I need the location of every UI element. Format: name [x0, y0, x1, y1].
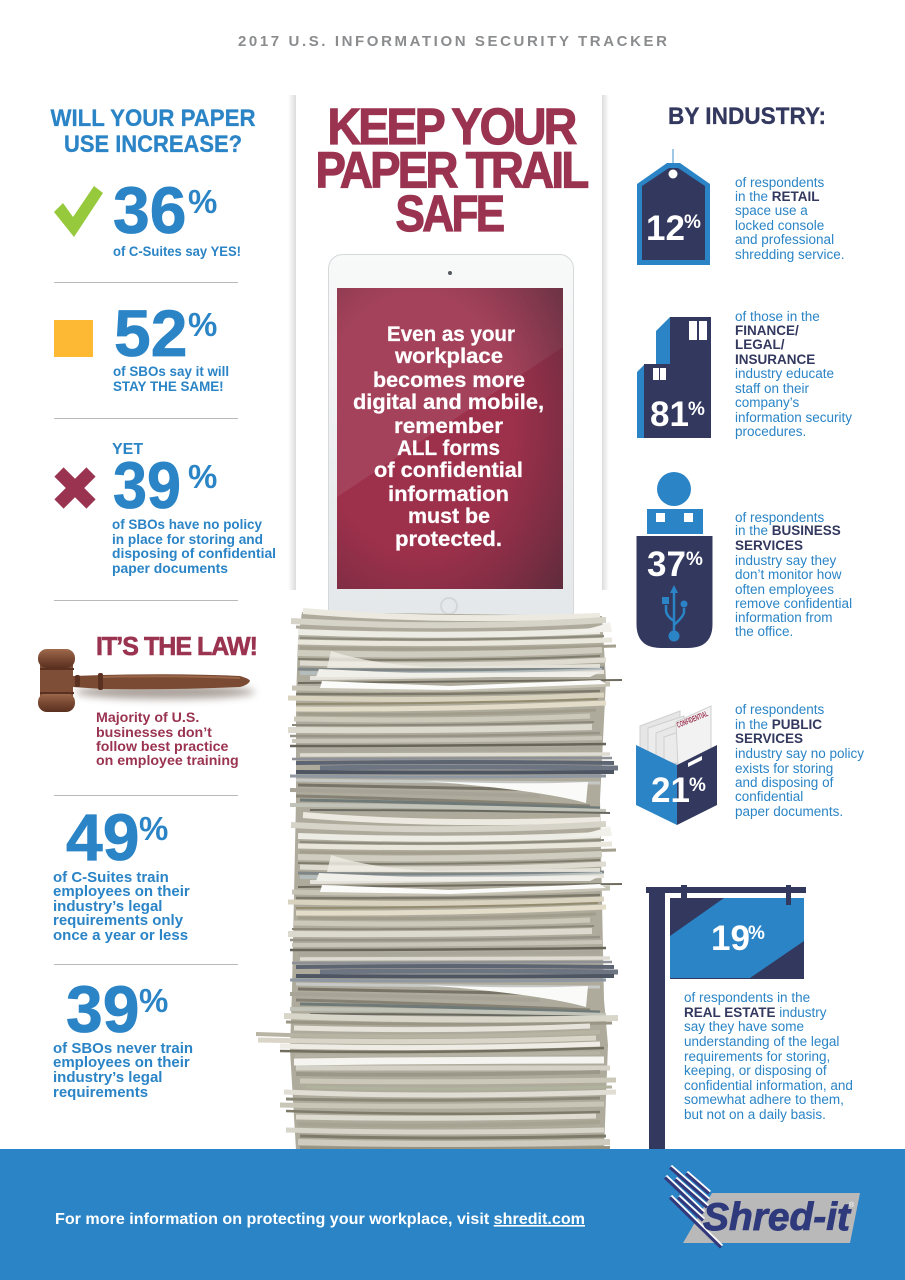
stat: 49 percent: 49 — [66, 800, 139, 874]
tablet text: becomes more — [373, 369, 525, 392]
text: real estate: industry — [776, 1005, 827, 1020]
text: finance: LEGAL/ — [735, 337, 785, 352]
stat: 39 percent never train: % — [139, 982, 168, 1019]
stat: 36 percent — [113, 173, 241, 259]
text: finance: company’s — [735, 395, 800, 410]
text: finance: industry educate — [735, 366, 834, 381]
text: public services: in the PUBLIC — [735, 717, 822, 732]
stat: 49 percent — [53, 800, 190, 944]
heading: will your paper use increase: USE INCREASE? — [64, 131, 242, 158]
text: real estate: keeping, or disposing of — [684, 1063, 827, 1078]
tablet camera — [448, 271, 452, 275]
text: business services: SERVICES — [735, 538, 803, 553]
tablet text: digital and mobile, — [353, 391, 544, 414]
panel: real estate — [646, 885, 853, 1152]
text: finance: staff on their — [735, 381, 810, 396]
text: real estate: somewhat adhere to them, — [684, 1092, 844, 1107]
stat: 36 percent: % — [188, 183, 217, 220]
panel: retail — [637, 149, 845, 265]
panel: it's the law — [96, 631, 257, 769]
icon: usb drive: % — [686, 549, 703, 570]
text: majority of businesses — [96, 710, 239, 769]
stat: 39 percent: % — [188, 458, 217, 495]
tablet text: must be — [408, 505, 490, 528]
panel: will your paper use increase — [50, 105, 276, 576]
text: majority of businesses: Majority of U.S. — [96, 710, 199, 726]
tablet text: ALL forms — [397, 437, 500, 460]
icon: gavel — [38, 649, 255, 712]
tablet — [328, 254, 574, 634]
text: real estate: of respondents in the — [684, 990, 810, 1005]
text: real estate: but not on a daily basis. — [684, 1107, 826, 1122]
text: public services: industry say no policy — [735, 746, 864, 761]
icon: file box — [636, 706, 717, 825]
text: business services: in the BUSINESS — [735, 523, 841, 538]
tablet text: information — [388, 483, 509, 506]
icon: buildings: 81 — [650, 395, 689, 434]
text: business services: remove confidential — [735, 596, 852, 611]
title: 2017 U.S. INFORMATION SECURITY TRACKER — [238, 33, 667, 50]
text: retail: shredding service. — [735, 247, 845, 262]
stat: 39 percent never train: 39 — [66, 972, 139, 1046]
stat: 39 percent — [112, 441, 276, 576]
stat: 52 percent — [113, 296, 229, 394]
shred-it logo: ® — [849, 1201, 855, 1209]
text: public services: SERVICES — [735, 731, 803, 746]
stat: 49 percent: once a year or less — [53, 927, 188, 944]
text: retail: and professional — [735, 232, 834, 247]
tablet text: protected. — [395, 528, 502, 551]
stat: 49 percent: of C-Suites train — [53, 869, 169, 886]
main heading: PAPER TRAIL — [316, 142, 588, 198]
text: majority of businesses: on employee training — [96, 753, 239, 769]
stat: 49 percent: requirements only — [53, 912, 184, 929]
icon: real estate sign: 19 — [711, 919, 750, 958]
shred-it logo — [665, 1166, 860, 1248]
icon: price tag: 12 — [646, 209, 685, 248]
heading: will your paper use increase — [50, 105, 256, 158]
text: business services: don’t monitor how — [735, 567, 842, 582]
icon: usb drive: 37 — [647, 545, 686, 584]
paper stack — [256, 611, 622, 1150]
text: business services: information from — [735, 610, 833, 625]
text: business services: industry say they — [735, 553, 837, 568]
tablet screen — [337, 288, 563, 589]
text: public services: confidential — [735, 789, 803, 804]
text: public services: paper documents. — [735, 804, 843, 819]
stat: 39 percent never train: requirements — [53, 1084, 148, 1101]
text: retail: of respondents — [735, 175, 825, 190]
stat: 39 percent never train: of SBOs never train — [53, 1040, 193, 1057]
icon: file box: 21 — [651, 771, 690, 810]
icon: file box: % — [689, 775, 706, 796]
stat: 36 percent: 36 — [113, 173, 186, 247]
tablet text: Even as your — [387, 323, 515, 346]
text: finance: information security — [735, 410, 852, 425]
text: business services: often employees — [735, 582, 834, 597]
stat: 39 percent: in place for storing and — [112, 532, 263, 547]
tablet text — [353, 323, 544, 551]
stat: 39 percent: YET — [112, 441, 143, 458]
footer text: For more information on protecting your workplace, visit shredit.com — [55, 1211, 585, 1228]
tablet text: workplace — [394, 345, 503, 368]
stat: 52 percent: of SBOs say it will — [113, 364, 229, 379]
tablet text: remember — [394, 415, 503, 438]
icon: real estate sign — [646, 885, 806, 1152]
text: finance: procedures. — [735, 424, 806, 439]
text: public services: and disposing of — [735, 775, 834, 790]
icon: file box: CONFIDENTIAL — [675, 709, 709, 730]
tablet frame — [328, 254, 574, 634]
text: retail: locked console — [735, 218, 824, 233]
stat: 39 percent never train: employees on their — [53, 1054, 190, 1071]
tablet screen glare — [337, 288, 563, 497]
text: real estate: requirements for storing, — [684, 1049, 830, 1064]
heading: by industry: BY INDUSTRY: — [668, 103, 826, 130]
text: real estate: REAL ESTATE — [684, 1005, 776, 1020]
stat: 39 percent: 39 — [113, 448, 181, 522]
icon: maroon x — [59, 472, 91, 504]
text: majority of businesses: follow best practice — [96, 739, 229, 755]
stat: 39 percent: paper documents — [112, 561, 228, 576]
tablet text: of confidential — [374, 459, 523, 482]
text: majority of businesses: businesses don’t — [96, 725, 212, 741]
text: finance: of those in the — [735, 309, 820, 324]
stat: 39 percent: of SBOs have no policy — [112, 517, 263, 532]
stat: 39 percent never train — [53, 972, 193, 1101]
stat: 49 percent: % — [139, 810, 168, 847]
shred-it logo: Shred-it — [703, 1196, 852, 1239]
tablet screen vignette — [337, 288, 563, 589]
stat: 39 percent never train: industry’s legal — [53, 1069, 162, 1086]
footer band — [0, 1149, 905, 1280]
text: business services: the office. — [735, 624, 793, 639]
icon: usb drive — [636, 472, 712, 648]
text: real estate: understanding of the legal — [684, 1034, 839, 1049]
text: public services: exists for storing — [735, 761, 833, 776]
heading: it's the law: IT’S THE LAW! — [96, 631, 257, 661]
text: finance: INSURANCE — [735, 352, 815, 367]
icon: real estate sign: % — [748, 923, 765, 944]
text: real estate: say they have some — [684, 1019, 804, 1034]
stat: 49 percent: industry’s legal — [53, 898, 162, 915]
text: retail: in the RETAIL — [735, 189, 820, 204]
stat: 52 percent: 52 — [114, 296, 187, 370]
main heading — [316, 98, 588, 242]
stat: 39 percent: disposing of confidential — [112, 546, 276, 561]
text: finance: FINANCE/ — [735, 323, 799, 338]
panel dividers — [288, 95, 609, 590]
heading: will your paper use increase: WILL YOUR PAPER — [50, 105, 256, 132]
panel: public services — [636, 702, 864, 825]
text: public services: of respondents — [735, 702, 825, 717]
icon: price tag: % — [684, 212, 701, 233]
icon: green check — [54, 186, 103, 237]
icon: buildings — [637, 317, 711, 438]
text: real estate: confidential information, and — [684, 1078, 853, 1093]
stat: 36 percent: of C-Suites say YES! — [113, 244, 241, 259]
text: business services: of respondents — [735, 510, 825, 525]
stat: 49 percent: employees on their — [53, 883, 190, 900]
main heading: SAFE — [396, 185, 504, 242]
stat: 52 percent: STAY THE SAME! — [113, 379, 224, 394]
icon: buildings: % — [688, 399, 705, 420]
tablet home button — [441, 598, 457, 614]
text: retail: space use a — [735, 203, 808, 218]
icon: yellow square — [54, 320, 93, 357]
panel: business services — [636, 472, 852, 648]
main heading: KEEP YOUR — [328, 98, 576, 155]
icon: price tag — [637, 149, 710, 265]
panel: finance — [637, 309, 852, 439]
stat: 52 percent: % — [188, 306, 217, 343]
